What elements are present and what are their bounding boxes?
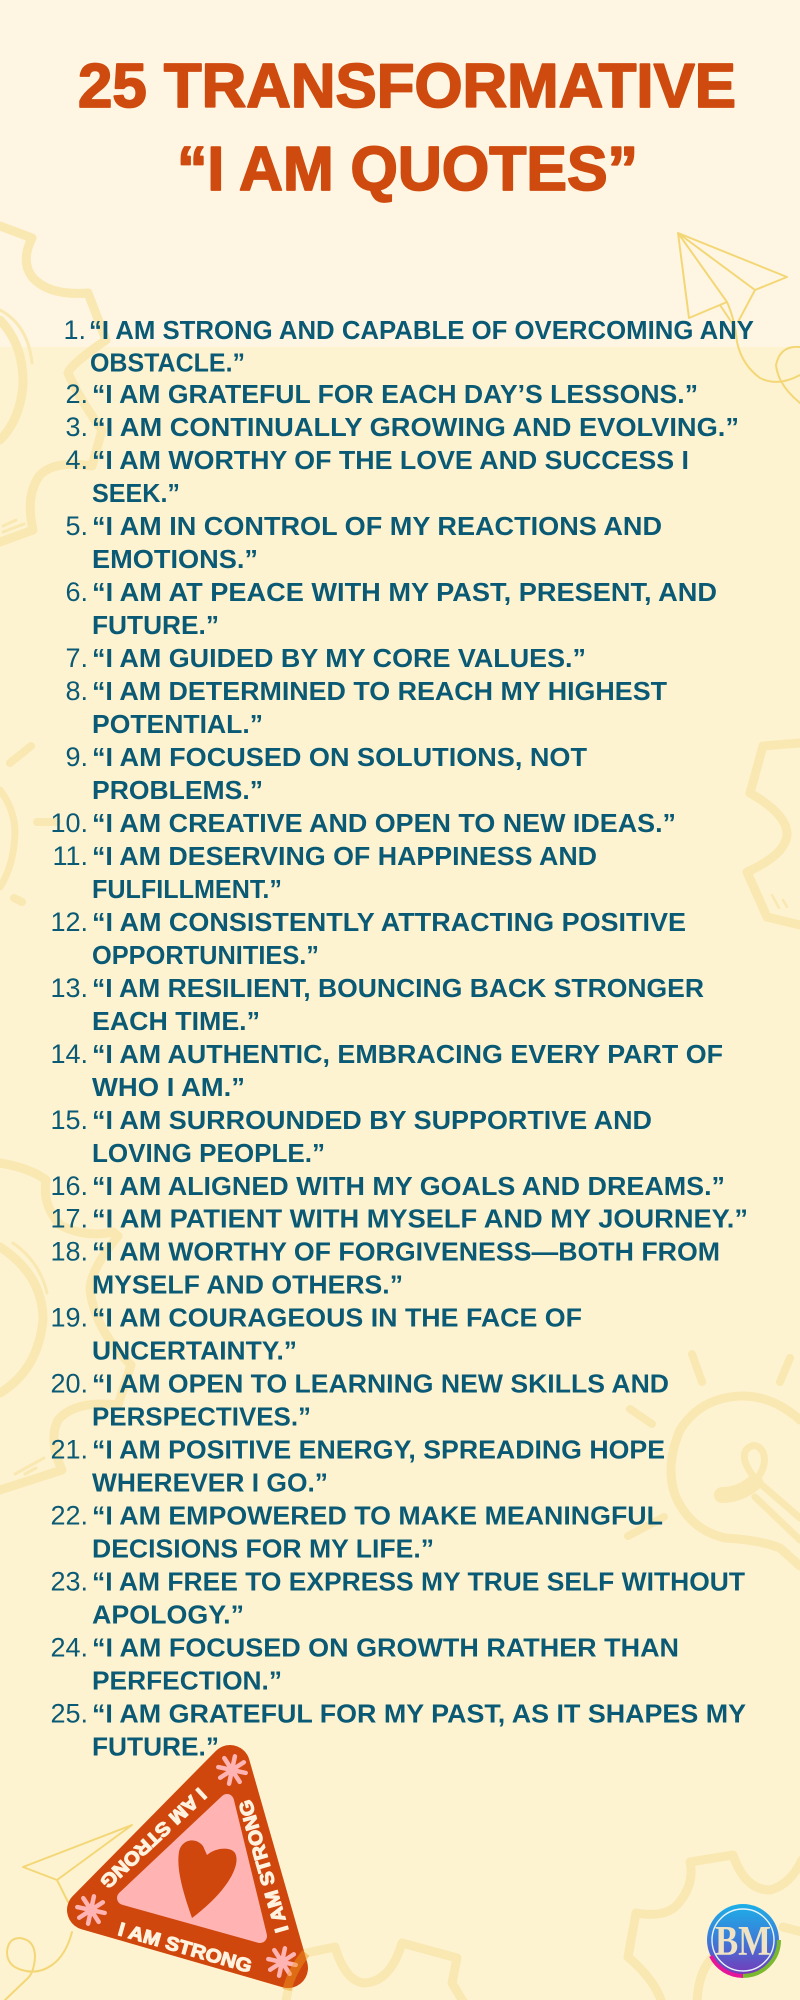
quote 21 — [50, 1435, 665, 1498]
quote 9: “I AM FOCUSED ON SOLUTIONS, NOT — [92, 742, 587, 772]
quote 16: “I AM ALIGNED WITH MY GOALS AND DREAMS.” — [92, 1171, 725, 1201]
quote 22: “I AM EMPOWERED TO MAKE MEANINGFUL — [92, 1501, 663, 1531]
quote 19: UNCERTAINTY.” — [92, 1336, 297, 1366]
quote 22 — [50, 1501, 663, 1564]
quote 9 — [65, 742, 587, 805]
decoration: gear top left — [0, 226, 106, 542]
quote 24: “I AM FOCUSED ON GROWTH RATHER THAN — [92, 1633, 679, 1663]
decoration: paper plane bottom left — [5, 1825, 132, 2000]
quote 2: “I AM GRATEFUL FOR EACH DAY’S LESSONS.” — [92, 379, 698, 409]
quote 21: 21. — [50, 1435, 88, 1465]
quote 20: “I AM OPEN TO LEARNING NEW SKILLS AND — [92, 1369, 669, 1399]
quote 14: “I AM AUTHENTIC, EMBRACING EVERY PART OF — [92, 1039, 723, 1069]
quote 6 — [65, 577, 717, 640]
badge: I am strong triangle sticker — [74, 1753, 299, 1979]
decoration: lightbulb left middle — [0, 746, 57, 902]
decoration: gear left lower — [0, 1163, 131, 1490]
quote 11: FULFILLMENT.” — [92, 874, 282, 904]
quote 17: “I AM PATIENT WITH MYSELF AND MY JOURNEY.” — [92, 1204, 748, 1234]
quote 10: 10. — [50, 808, 88, 838]
quote 8: 8. — [65, 676, 88, 706]
title — [78, 52, 736, 204]
quote 2: 2. — [65, 379, 88, 409]
quote 25 — [50, 1699, 746, 1762]
badge text bottom: I AM STRONG — [116, 1919, 254, 1978]
icon: flower left — [74, 1893, 108, 1927]
quote 12 — [50, 907, 686, 970]
badge text right: I AM STRONG — [236, 1797, 293, 1935]
quote 15 — [50, 1105, 652, 1168]
quote 17: 17. — [50, 1204, 88, 1234]
badge text left: I AM STRONG — [95, 1783, 210, 1892]
quote 1 — [63, 315, 754, 378]
quote 18 — [50, 1237, 720, 1300]
quote 21: WHEREVER I GO.” — [92, 1468, 328, 1498]
quote 8: POTENTIAL.” — [92, 709, 263, 739]
quote 6: “I AM AT PEACE WITH MY PAST, PRESENT, AND — [92, 577, 717, 607]
quote 25: FUTURE.” — [92, 1732, 219, 1762]
quote 18: 18. — [50, 1237, 88, 1267]
decoration: gear right middle — [747, 743, 800, 925]
quote 6: FUTURE.” — [92, 610, 219, 640]
quote 13: 13. — [50, 973, 88, 1003]
quote 19: “I AM COURAGEOUS IN THE FACE OF — [92, 1303, 582, 1333]
quote 14: 14. — [50, 1039, 88, 1069]
quote 5: “I AM IN CONTROL OF MY REACTIONS AND — [92, 511, 662, 541]
quote 12: OPPORTUNITIES.” — [92, 940, 319, 970]
quote 1: OBSTACLE.” — [90, 348, 245, 378]
decoration: bottom gears — [286, 1855, 800, 2000]
decoration: paper plane top right — [678, 233, 800, 403]
quote 4: “I AM WORTHY OF THE LOVE AND SUCCESS I — [92, 445, 689, 475]
quote 13: “I AM RESILIENT, BOUNCING BACK STRONGER — [92, 973, 704, 1003]
title line 1: 25 TRANSFORMATIVE — [78, 52, 736, 121]
numbered list of quotes — [50, 315, 754, 1762]
quote 25: 25. — [50, 1699, 88, 1729]
quote 15: 15. — [50, 1105, 88, 1135]
quote 11 — [52, 841, 597, 904]
quote 11: 11. — [52, 841, 88, 871]
icon: flower top — [215, 1753, 249, 1787]
quote 11: “I AM DESERVING OF HAPPINESS AND — [92, 841, 597, 871]
quote 20 — [50, 1369, 669, 1432]
quote 14 — [50, 1039, 723, 1102]
quote 16: 16. — [50, 1171, 88, 1201]
decoration: gear overlap on badge — [287, 1953, 306, 1990]
logo: BM circular mark — [707, 1904, 779, 1976]
quote 13 — [50, 973, 704, 1036]
quote 9: 9. — [65, 742, 88, 772]
quote 18: MYSELF AND OTHERS.” — [92, 1270, 403, 1300]
logo letters: BM — [715, 1919, 771, 1965]
title line 2: “I AM QUOTES” — [177, 135, 638, 204]
quote 3: 3. — [65, 412, 88, 442]
quote 12: 12. — [50, 907, 88, 937]
quote 23: APOLOGY.” — [92, 1600, 244, 1630]
quote 15: LOVING PEOPLE.” — [92, 1138, 325, 1168]
quote 8: “I AM DETERMINED TO REACH MY HIGHEST — [92, 676, 667, 706]
quote 4: SEEK.” — [92, 478, 180, 508]
quote 5 — [65, 511, 662, 574]
quote 23: 23. — [50, 1567, 88, 1597]
quote 15: “I AM SURROUNDED BY SUPPORTIVE AND — [92, 1105, 652, 1135]
quote 20: PERSPECTIVES.” — [92, 1402, 311, 1432]
quote 24 — [50, 1633, 679, 1696]
quote 3: “I AM CONTINUALLY GROWING AND EVOLVING.” — [92, 412, 739, 442]
quote 24: PERFECTION.” — [92, 1666, 282, 1696]
quote 7: “I AM GUIDED BY MY CORE VALUES.” — [92, 643, 586, 673]
quote 1: “I AM STRONG AND CAPABLE OF OVERCOMING ANY — [89, 315, 754, 345]
quote 5: EMOTIONS.” — [92, 544, 258, 574]
quote 9: PROBLEMS.” — [92, 775, 263, 805]
quote 23: “I AM FREE TO EXPRESS MY TRUE SELF WITHOUT — [92, 1567, 745, 1597]
quote 10: “I AM CREATIVE AND OPEN TO NEW IDEAS.” — [92, 808, 676, 838]
icon: flower right — [265, 1945, 299, 1979]
quote 23 — [50, 1567, 745, 1630]
quote 13: EACH TIME.” — [92, 1006, 260, 1036]
quote 22: DECISIONS FOR MY LIFE.” — [92, 1534, 434, 1564]
quote 20: 20. — [50, 1369, 88, 1399]
quote 7: 7. — [65, 643, 88, 673]
quote 19: 19. — [50, 1303, 88, 1333]
quote 8 — [65, 676, 667, 739]
quote 18: “I AM WORTHY OF FORGIVENESS—BOTH FROM — [92, 1237, 720, 1267]
quote 21: “I AM POSITIVE ENERGY, SPREADING HOPE — [92, 1435, 665, 1465]
quote 14: WHO I AM.” — [92, 1072, 245, 1102]
quote 25: “I AM GRATEFUL FOR MY PAST, AS IT SHAPES MY — [92, 1699, 746, 1729]
icon: heart — [178, 1840, 237, 1918]
quote 24: 24. — [50, 1633, 88, 1663]
quote 4 — [65, 445, 689, 508]
quote 4: 4. — [65, 445, 88, 475]
quote 5: 5. — [65, 511, 88, 541]
quote 6: 6. — [65, 577, 88, 607]
quote 12: “I AM CONSISTENTLY ATTRACTING POSITIVE — [92, 907, 686, 937]
quote 19 — [50, 1303, 582, 1366]
quote 22: 22. — [50, 1501, 88, 1531]
quote 1: 1. — [63, 315, 86, 345]
decoration: lightbulb right — [628, 1354, 800, 1566]
